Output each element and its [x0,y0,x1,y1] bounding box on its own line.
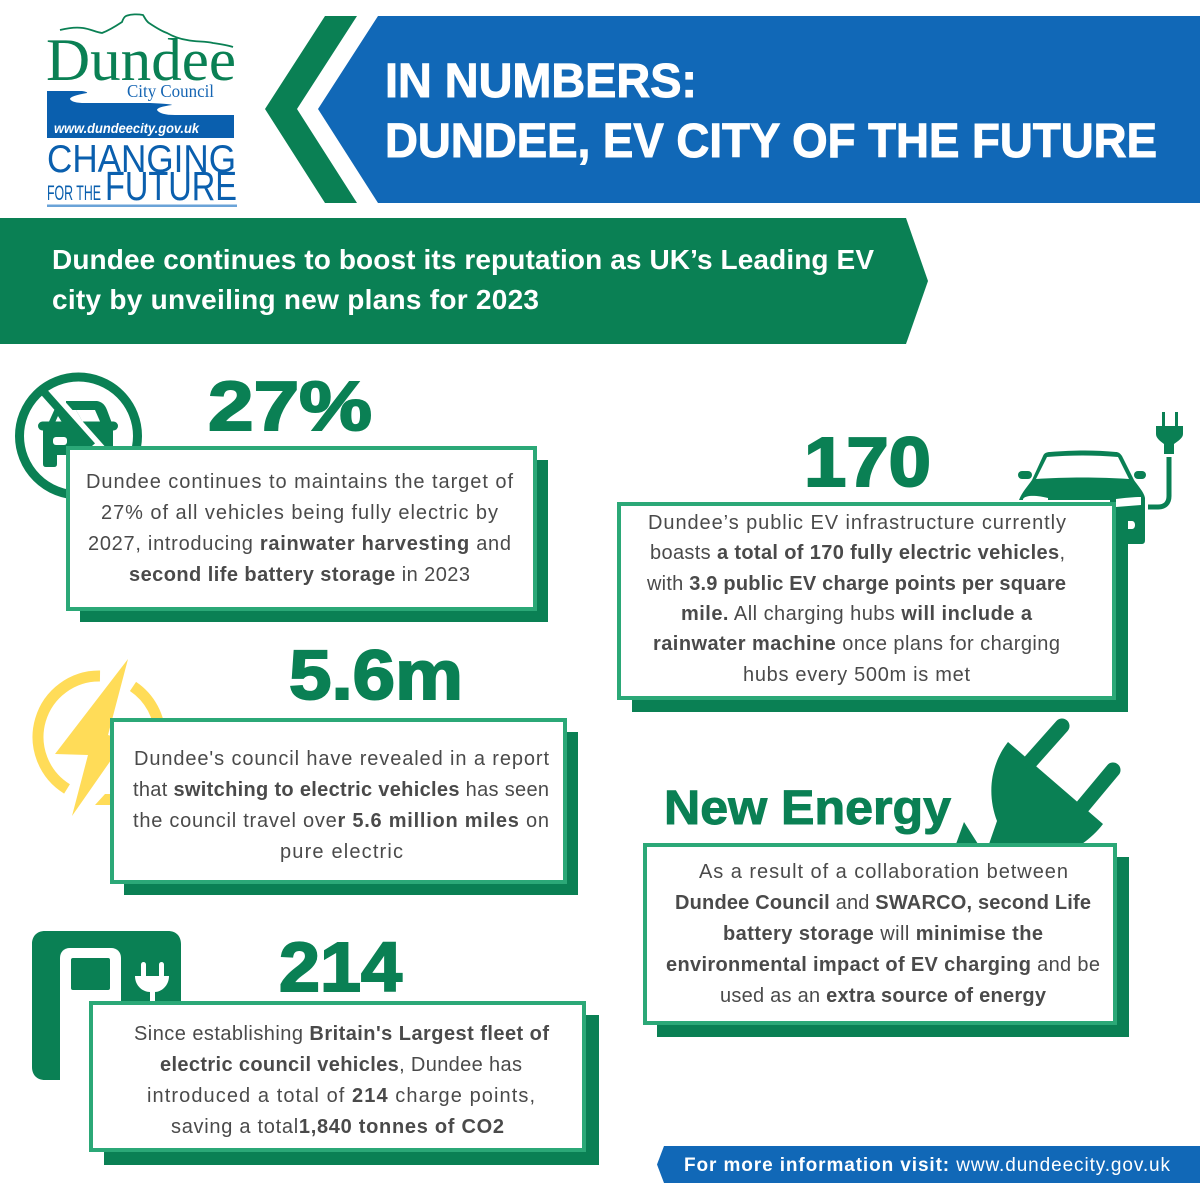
logo future: FUTURE [105,163,237,209]
card: 5.6m [112,720,578,895]
stat: 5.6m: 5.6m [289,636,463,714]
card text: hubs every 500m is met [743,664,970,686]
card text: boasts a total of 170 fully electric vehicles, [650,542,1065,564]
logo name: Dundee [46,27,236,93]
card text: 27% of all vehicles being fully electric by [101,502,498,524]
footer text: For more information visit: www.dundeecity.gov.uk [684,1155,1170,1176]
header chevron [265,16,357,203]
card: New Energy [645,845,1129,1037]
card text: Dundee's council have revealed in a report [134,748,549,770]
card text: As a result of a collaboration between [699,861,1068,883]
card text: Since establishing Britain's Largest fleet of [134,1023,549,1045]
card text: used as an extra source of energy [720,985,1047,1007]
card text [134,1023,549,1138]
logo web address: www.dundeecity.gov.uk [54,120,200,136]
logo river [47,91,234,138]
title: IN NUMBERS: [385,55,697,108]
header banner [318,16,1200,203]
card text: Dundee continues to maintains the target of [86,471,513,493]
stat: 214: 214 [279,928,402,1006]
card text: pure electric [280,841,403,863]
card text: saving a total1,840 tonnes of CO2 [171,1116,504,1138]
logo changing: CHANGING [47,138,236,181]
card text [86,471,513,586]
logo hill outline [60,14,233,47]
stat: 170: 170 [804,423,931,501]
card text [646,512,1066,686]
card text: the council travel over 5.6 million miles on [133,810,549,832]
card text: with 3.9 public EV charge points per square [646,573,1066,595]
intro text [52,244,874,315]
card text [666,861,1100,1007]
card text [133,748,549,863]
card: 214 [91,1003,599,1165]
footer banner [657,1146,1200,1183]
card text: battery storage will minimise the [723,923,1043,945]
icon: no cars [20,377,138,495]
card text: Dundee Council and SWARCO, second Life [675,892,1091,914]
card text: mile. All charging hubs will include a [681,603,1033,625]
card text: environmental impact of EV charging and be [666,954,1100,976]
icon: electric car with plug [1018,412,1183,544]
title: DUNDEE, EV CITY OF THE FUTURE [385,115,1157,168]
card text: second life battery storage in 2023 [129,564,470,586]
card text: Dundee’s public EV infrastructure currently [648,512,1066,534]
card: 170 [619,504,1128,712]
card text: 2027, introducing rainwater harvesting and [88,533,511,555]
card text: that switching to electric vehicles has seen [133,779,549,801]
heading: New Energy: New Energy [664,782,951,835]
logo subtitle: City Council [127,81,214,101]
card: 27% [68,448,548,622]
icon: plug [956,726,1113,844]
title [385,55,1157,168]
intro text: Dundee continues to boost its reputation as UK’s Leading EV [52,244,874,275]
logo for the: FOR THE [47,182,101,205]
intro banner [0,218,928,344]
icon: lightning bolt [38,659,160,816]
intro text: city by unveiling new plans for 2023 [52,284,539,315]
card text: rainwater machine once plans for charging [653,633,1060,655]
icon: charging station [32,931,181,1080]
logo: Dundee City Council [46,14,237,209]
stat: 27%: 27% [208,367,372,445]
card text: introduced a total of 214 charge points, [147,1085,535,1107]
card text: electric council vehicles, Dundee has [160,1054,522,1076]
